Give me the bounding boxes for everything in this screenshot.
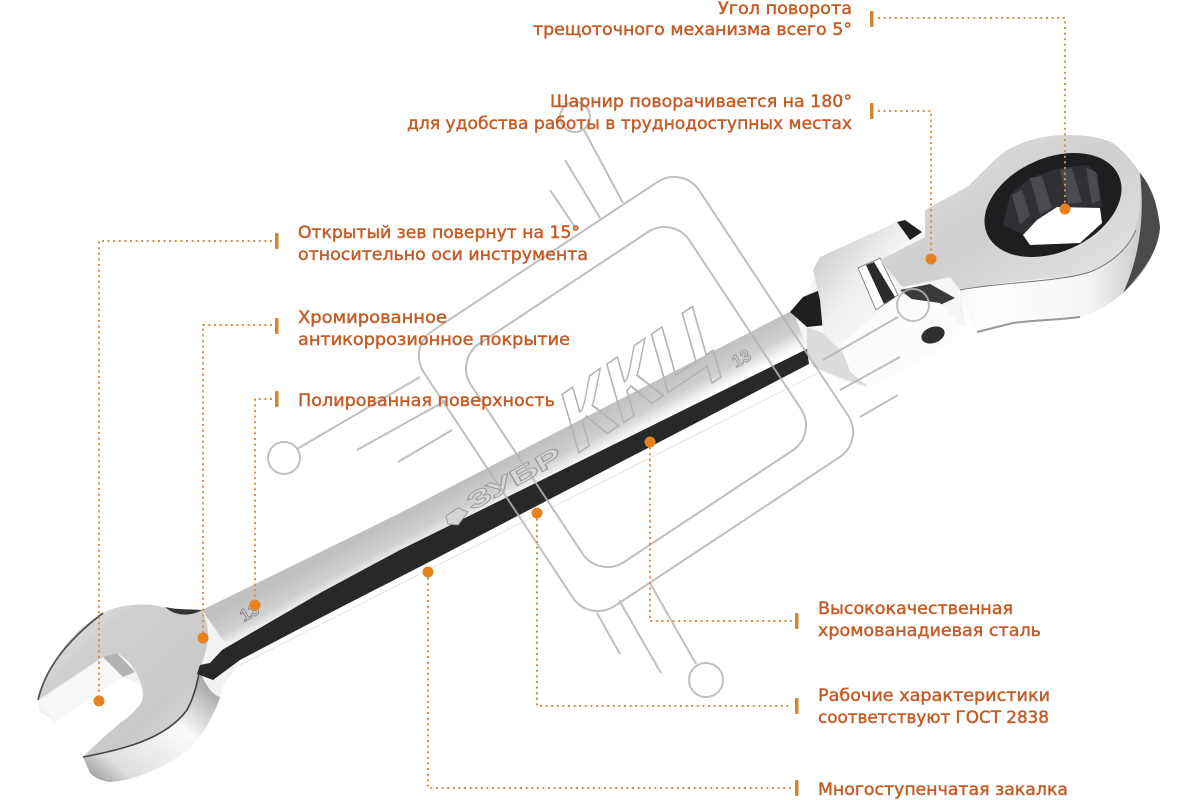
anchor dot (94, 696, 104, 706)
callout text: Полированная поверхность (298, 391, 555, 411)
callout: ratchet angle (533, 0, 1070, 214)
callout text: Высококачественная (818, 599, 1013, 619)
anchor dot (198, 632, 208, 644)
size mark 13 right: 13 (729, 346, 754, 371)
leader line (99, 241, 272, 701)
callout text: Открытый зев повернут на 15° (298, 223, 580, 243)
leader line (537, 513, 792, 706)
anchor dot (1060, 204, 1070, 214)
pivot pin (919, 323, 947, 347)
callout: hinge rotation (407, 92, 936, 264)
callout: multistage hardening (422, 566, 1068, 800)
callout text: антикоррозионное покрытие (298, 330, 570, 350)
dark fuller groove (197, 349, 809, 680)
watermark logotype: ККЦ (552, 284, 722, 475)
wrench shaft (202, 310, 820, 665)
callout text (407, 92, 852, 134)
dark outer side (1123, 173, 1160, 293)
callout text (818, 599, 1041, 641)
tick (870, 103, 874, 119)
neck crease (165, 607, 202, 615)
watermark node: left (268, 377, 452, 474)
ring top face (880, 135, 1140, 290)
tick (275, 233, 278, 249)
shaft engraving: brand: ЗУБР (462, 442, 566, 515)
brand arrow mark (446, 508, 468, 525)
callout text: трещоточного механизма всего 5° (533, 20, 852, 40)
anchor dot (644, 436, 656, 448)
ratchet ring head (880, 133, 1160, 332)
leader line (650, 442, 792, 621)
cap (897, 220, 922, 240)
callout text: Шарнир поворачивается на 180° (550, 92, 852, 112)
tick (275, 318, 278, 334)
yoke (900, 284, 955, 305)
anchor dot (422, 566, 434, 578)
size mark 13 left: 13 (237, 600, 262, 625)
leader line (878, 111, 931, 259)
leader line (428, 572, 792, 788)
tick (795, 698, 798, 714)
watermark frame (407, 165, 865, 623)
jaw silhouette (38, 605, 240, 782)
callout: chrome coating (198, 308, 570, 644)
slot (858, 258, 898, 310)
watermark (268, 102, 929, 697)
leader line (878, 18, 1065, 209)
callout text: соответствуют ГОСТ 2838 (818, 708, 1049, 728)
wrench (38, 133, 1160, 782)
hinge knuckle (790, 220, 965, 388)
ratchet hole (968, 133, 1138, 277)
callout: GOST compliance (532, 508, 1050, 728)
leader line (203, 325, 272, 638)
tick (795, 613, 798, 629)
callout text: хромованадиевая сталь (818, 621, 1041, 641)
callout text: Рабочие характеристики (818, 686, 1050, 706)
callout text: Хромированное (298, 308, 447, 328)
watermark node: top (550, 102, 623, 230)
callout: chrome vanadium steel (644, 436, 1041, 641)
dark joint (790, 290, 826, 327)
tick (870, 11, 874, 27)
callout: polished surface (250, 391, 555, 610)
ring silhouette (880, 135, 1160, 332)
anchor dot (250, 600, 260, 610)
callout text (818, 686, 1050, 728)
jaw inner wall (40, 657, 123, 722)
lower rim (83, 672, 220, 782)
knuckle body (813, 222, 920, 353)
callout text: Многоступенчатая закалка (818, 780, 1068, 800)
leader line (255, 399, 272, 605)
anchor dot (926, 254, 936, 264)
open-end jaw head (38, 605, 240, 782)
joint collar (807, 327, 870, 387)
knuckle silhouette (793, 222, 965, 388)
anchor dot (532, 508, 542, 518)
watermark node: right (823, 289, 929, 417)
tick (275, 391, 278, 407)
callout text (298, 308, 570, 350)
seam and edge lines (83, 667, 200, 757)
watermark node: bottom (597, 583, 723, 697)
callout: open jaw angle (94, 223, 588, 706)
callout text (533, 0, 852, 40)
callout text: относительно оси инструмента (298, 245, 588, 265)
jaw front face (38, 605, 208, 757)
tick (795, 780, 798, 796)
callout text: для удобства работы в труднодоступных местах (407, 114, 852, 134)
callout text (298, 223, 588, 265)
